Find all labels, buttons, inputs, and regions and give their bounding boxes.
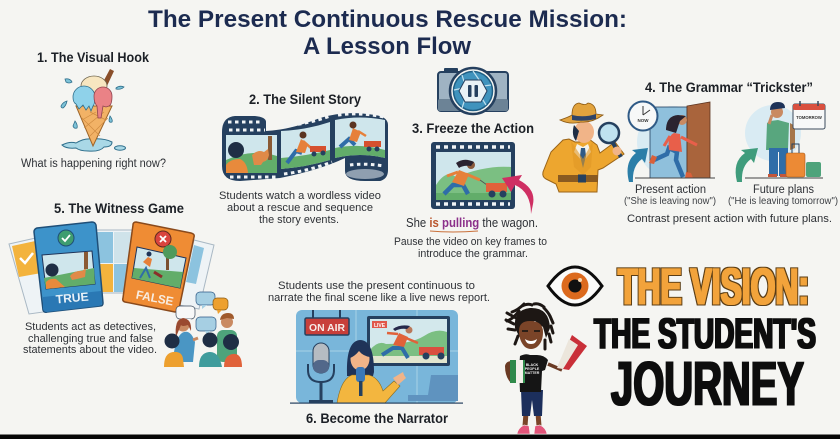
icon: film strip [222,113,388,181]
text: contrast note: Contrast present action with future plans. [627,213,832,225]
heading: the grammar trickster: 4. The Grammar “Trickster” [645,80,813,95]
text: freeze description [394,236,547,260]
icon: microphone [308,343,334,403]
text: present action label [624,184,716,207]
card: false: FALSE [135,288,175,309]
panel: 6 become the narrator [268,280,490,426]
text: present action label: Present action [635,184,706,196]
text: future plans label [728,184,838,207]
figure: news reporter [337,340,406,403]
sign: on air: ON AIR [309,323,346,334]
panel: 5 witness game [9,201,242,367]
screen: live runner: LIVE [374,323,386,329]
heading: the silent story: 2. The Silent Story [249,92,361,107]
figure: student avatar: BLACK [526,363,539,367]
heading: the witness game: 5. The Witness Game [54,201,184,216]
text: silent story description [219,190,381,226]
panel: the vision [505,258,816,434]
title: The Present Continuous Rescue Mission: [148,6,627,33]
icon: eye [548,267,602,305]
icon: melting ice cream [61,69,126,151]
screen: live runner [367,316,450,366]
text: hook question: What is happening right now? [21,158,166,170]
icon: film frame with runner [431,142,515,209]
title: A Lesson Flow [303,33,471,60]
icon: detective [543,103,624,192]
icon: camera with pause [438,68,508,114]
figure: student avatar: MATTER [525,371,540,375]
sign: on air [305,310,349,335]
bottom bar [0,434,840,439]
card: false [123,222,194,312]
text: witness description: statements about the video. [23,344,157,356]
text: freeze description: introduce the grammar. [418,248,528,260]
icon: clock now: NOW [638,118,649,123]
heading: freeze the action: 3. Freeze the Action [412,121,534,136]
text: narrator description: Students use the present continuous to [278,280,475,292]
text: future plans label: Future plans [753,184,814,196]
icon: discussion group [164,292,242,367]
arrow: blue up [628,148,648,182]
card: true [34,222,103,312]
icon: background cards [9,230,214,314]
text: freeze description: Pause the video on key frames to [394,236,547,248]
figure: present action [628,102,715,182]
text: silent story description: Students watch a wordless video [219,190,381,202]
text: witness description: challenging true and false [28,333,153,345]
title [148,6,627,60]
heading: the visual hook: 1. The Visual Hook [37,50,149,65]
text: narrator description [268,280,490,304]
text: present action label: ("She is leaving now") [624,196,716,207]
panel: 4 grammar trickster [543,80,838,225]
arrow: green up [736,148,758,182]
arrow: pink pointer [502,175,533,214]
card: true: TRUE [55,290,89,306]
text: witness description: Students act as detectives, [25,321,156,333]
illustration: news studio [290,310,463,404]
panel: 2 silent story [219,92,388,226]
icon: tomorrow calendar: TOMORROW [796,115,822,120]
figure: student avatar: PEOPLE [525,367,540,371]
text: narrator description: narrate the final scene like a live news report. [268,292,490,304]
text: witness description [23,321,157,356]
figure: student avatar [505,304,587,434]
text: silent story description: the story events. [259,214,339,226]
text: example sentence: She is pulling the wagon. [406,216,538,230]
figure: future plans [736,101,825,182]
panel: 3 freeze the action [394,68,547,260]
panel: 1 visual hook [21,50,166,170]
text: silent story description: about a rescue and sequence [227,202,373,214]
heading: become the narrator: 6. Become the Narrator [306,411,449,426]
